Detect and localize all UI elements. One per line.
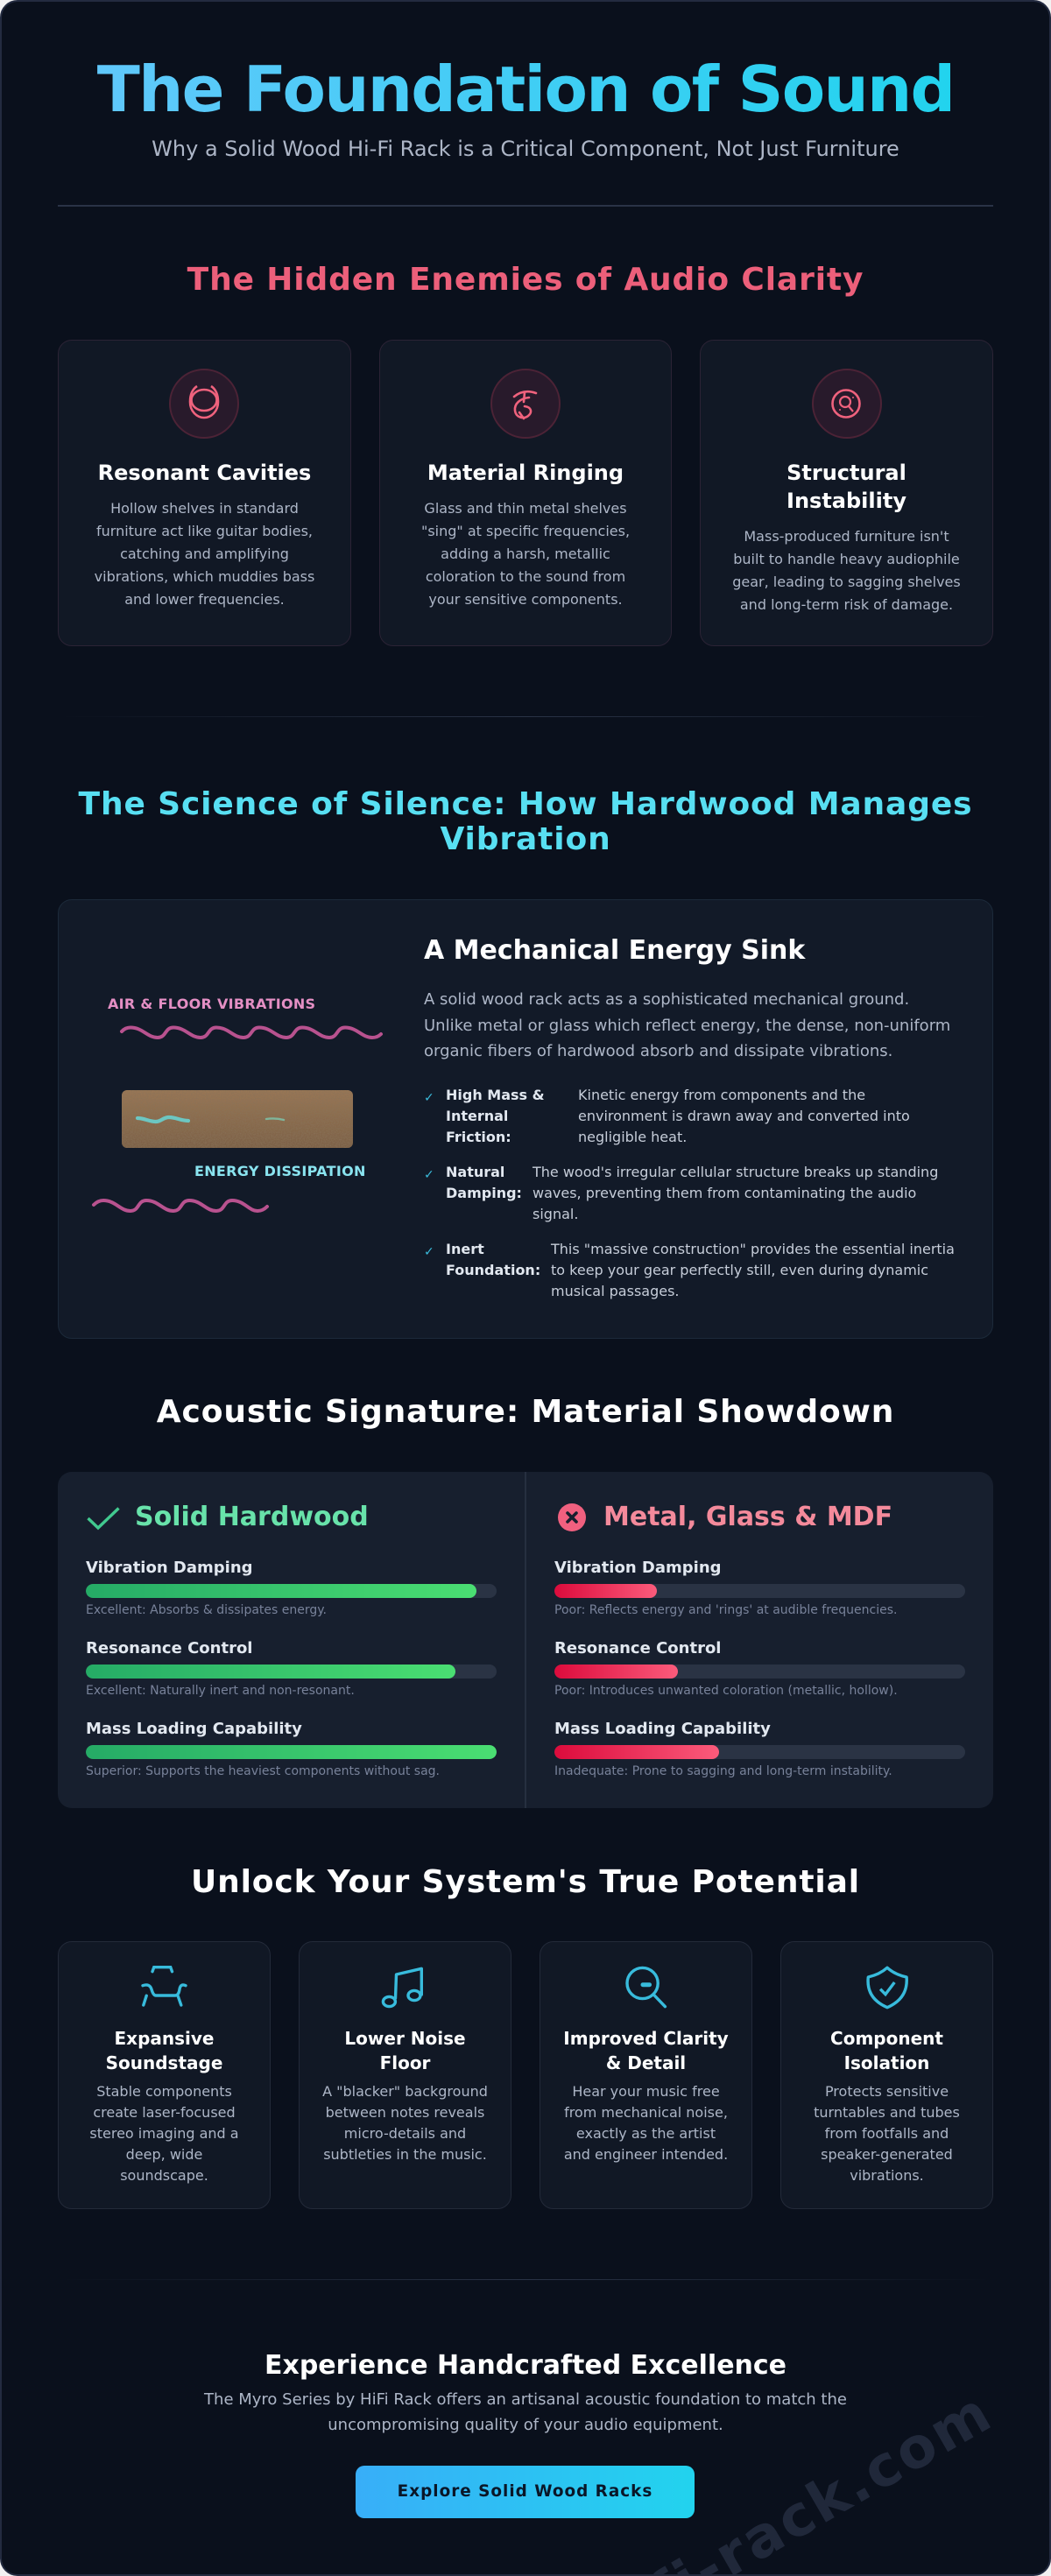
metric: mass loading: Mass Loading Capability	[554, 1720, 771, 1738]
diagram: vibration absorbing wood: ENERGY DISSIPATION	[194, 1163, 366, 1179]
list item: high mass: Friction:	[446, 1129, 511, 1145]
icon: resonant cavities	[169, 369, 239, 439]
metric: mass loading	[86, 1720, 497, 1778]
panel: structural instability	[700, 340, 993, 646]
paragraph: A solid wood rack acts as a sophisticated mechanical ground.	[424, 990, 909, 1009]
list item: inert foundation: Foundation:	[446, 1262, 540, 1278]
paragraph	[424, 990, 950, 1060]
list item: inert foundation: This "massive construction" provides the essential inertia	[551, 1241, 955, 1257]
title: The Foundation of Sound	[97, 53, 954, 126]
heading: Metal, Glass & MDF	[603, 1502, 892, 1532]
heading: A Mechanical Energy Sink	[424, 935, 805, 966]
diagram: vibration absorbing wood: AIR & FLOOR VIBRATIONS	[108, 996, 315, 1012]
column: solid hardwood	[86, 1502, 497, 1778]
description: your sensitive components.	[428, 591, 623, 608]
icon: magnifier	[625, 1967, 667, 2009]
heading: Floor	[380, 2052, 430, 2073]
list item: high mass: High Mass &	[446, 1087, 545, 1103]
description: subtleties in the music.	[323, 2146, 487, 2163]
icon: check	[87, 1507, 120, 1531]
heading: Resonant Cavities	[98, 461, 311, 485]
metric: mass loading: Mass Loading Capability	[86, 1720, 302, 1738]
description: vibrations, which muddies bass	[95, 568, 314, 585]
heading: Solid Hardwood	[135, 1502, 369, 1532]
metric: resonance control	[86, 1639, 497, 1698]
panel: comparison	[58, 1472, 993, 1808]
description	[732, 528, 961, 613]
metric: resonance control: Poor: Introduces unwanted coloration (metallic, hollow).	[554, 1684, 898, 1698]
metric: vibration damping: Poor: Reflects energy and 'rings' at audible frequencies.	[554, 1603, 897, 1617]
description: exactly as the artist	[576, 2125, 716, 2142]
heading: Component	[830, 2028, 943, 2049]
heading	[106, 2028, 222, 2073]
text: call to action	[203, 2390, 847, 2434]
icon: sofa	[141, 1966, 187, 2007]
description: gear, leading to sagging shelves	[732, 574, 961, 590]
icon: music note	[382, 1967, 423, 2009]
metric: vibration damping: Vibration Damping	[554, 1559, 722, 1577]
list item: inert foundation: to keep your gear perfectly still, even during dynamic	[551, 1262, 928, 1278]
heading: science of silence: The Science of Silence: How Hardwood Manages	[79, 786, 972, 822]
heading: Isolation	[844, 2052, 929, 2073]
list item: high mass	[424, 1087, 910, 1145]
description: A "blacker" background	[322, 2083, 488, 2100]
description: soundscape.	[120, 2167, 208, 2184]
description	[95, 500, 314, 608]
icon: structural instability	[812, 369, 882, 439]
list item: high mass: Kinetic energy from components and the	[578, 1087, 865, 1103]
list item: high mass: environment is drawn away and converted into	[578, 1108, 910, 1124]
heading: Structural	[786, 461, 906, 485]
text: call to action: The Myro Series by HiFi Rack offers an artisanal acoustic foundation to match the	[204, 2390, 847, 2409]
heading: unlock potential: Unlock Your System's True Potential	[191, 1864, 860, 1900]
heading: Lower Noise	[344, 2028, 466, 2049]
column: metal glass mdf	[554, 1502, 965, 1778]
description: from footfalls and	[825, 2125, 949, 2142]
description	[814, 2083, 960, 2184]
heading: science of silence: Vibration	[440, 821, 611, 857]
heading: & Detail	[606, 2052, 686, 2073]
panel: mechanical energy sink	[58, 899, 993, 1339]
metric: mass loading	[554, 1720, 965, 1778]
metric: resonance control	[554, 1639, 965, 1698]
list item: natural damping: The wood's irregular cellular structure breaks up standing	[533, 1164, 938, 1180]
description: deep, wide	[126, 2146, 202, 2163]
heading: Improved Clarity	[563, 2028, 729, 2049]
description: turntables and tubes	[814, 2104, 960, 2121]
heading	[786, 461, 906, 513]
heading	[830, 2028, 943, 2073]
subtitle: Why a Solid Wood Hi-Fi Rack is a Critical Component, Not Just Furniture	[152, 137, 899, 161]
description: furniture act like guitar bodies,	[96, 523, 313, 539]
paragraph: Unlike metal or glass which reflect energy, the dense, non-uniform	[424, 1017, 950, 1035]
list item: natural damping: ✓	[424, 1168, 434, 1182]
heading	[344, 2028, 466, 2073]
metric: mass loading: Superior: Supports the heaviest components without sag.	[86, 1764, 440, 1778]
list item: natural damping	[424, 1164, 938, 1222]
icon: material ringing	[490, 369, 561, 439]
list item: inert foundation: ✓	[424, 1245, 434, 1259]
panel: resonant cavities	[58, 340, 351, 646]
metric: vibration damping	[554, 1559, 965, 1617]
metric: vibration damping: Vibration Damping	[86, 1559, 253, 1577]
description: vibrations.	[850, 2167, 924, 2184]
list item: inert foundation: musical passages.	[551, 1283, 680, 1299]
icon: cross	[558, 1503, 586, 1531]
text: call to action: uncompromising quality of your audio equipment.	[328, 2416, 723, 2434]
description: speaker-generated	[821, 2146, 953, 2163]
metric: vibration damping	[86, 1559, 497, 1617]
panel: improved clarity	[540, 1941, 752, 2209]
description: Glass and thin metal shelves	[424, 500, 627, 517]
panel: component isolation	[780, 1941, 993, 2209]
paragraph: organic fibers of hardwood absorb and dissipate vibrations.	[424, 1042, 892, 1060]
description	[564, 2083, 728, 2163]
list item: high mass: ✓	[424, 1091, 434, 1105]
heading	[563, 2028, 729, 2073]
heading: science of silence	[79, 786, 972, 857]
metric: vibration damping: Excellent: Absorbs & dissipates energy.	[86, 1603, 327, 1617]
metric: mass loading: Inadequate: Prone to sagging and long-term instability.	[554, 1764, 892, 1778]
description: catching and amplifying	[120, 545, 289, 562]
metric: resonance control: Excellent: Naturally inert and non-resonant.	[86, 1684, 355, 1698]
list item: natural damping: waves, preventing them from contaminating the audio	[533, 1185, 916, 1201]
description: between notes reveals	[326, 2104, 484, 2121]
description: Hear your music free	[572, 2083, 720, 2100]
metric: resonance control: Resonance Control	[554, 1639, 721, 1658]
button: Explore Solid Wood Racks	[398, 2482, 652, 2501]
list item: natural damping: Damping:	[446, 1185, 522, 1201]
description: built to handle heavy audiophile	[733, 551, 960, 567]
panel: expansive soundstage	[58, 1941, 271, 2209]
description: Protects sensitive	[825, 2083, 949, 2100]
list item: natural damping: Natural	[446, 1164, 504, 1180]
description: stereo imaging and a	[89, 2125, 239, 2142]
description	[421, 500, 630, 608]
description: micro-details and	[344, 2125, 466, 2142]
icon: shield	[866, 1967, 908, 2009]
list item: natural damping: signal.	[533, 1206, 578, 1222]
heading: material showdown: Acoustic Signature: Material Showdown	[157, 1394, 894, 1430]
list item: inert foundation: Inert	[446, 1241, 484, 1257]
description: coloration to the sound from	[426, 568, 625, 585]
button	[356, 2466, 695, 2518]
list item: high mass: negligible heat.	[578, 1129, 687, 1145]
heading: Instability	[786, 489, 906, 513]
description: Mass-produced furniture isn't	[744, 528, 949, 545]
list item: high mass: Internal	[446, 1108, 508, 1124]
description: Stable components	[96, 2083, 232, 2100]
description: create laser-focused	[93, 2104, 236, 2121]
panel: lower noise floor	[299, 1941, 511, 2209]
description	[89, 2083, 239, 2184]
heading: call to action: Experience Handcrafted Excellence	[265, 2350, 786, 2381]
description: from mechanical noise,	[564, 2104, 728, 2121]
heading: Expansive	[114, 2028, 214, 2049]
description: and engineer intended.	[564, 2146, 728, 2163]
list item: inert foundation	[424, 1241, 955, 1299]
description	[322, 2083, 488, 2163]
description: adding a harsh, metallic	[441, 545, 610, 562]
description: and lower frequencies.	[124, 591, 285, 608]
heading: Material Ringing	[427, 461, 624, 485]
description: Hollow shelves in standard	[110, 500, 299, 517]
heading: hidden enemies: The Hidden Enemies of Audio Clarity	[187, 262, 864, 298]
description: and long-term risk of damage.	[740, 596, 953, 613]
heading: Soundstage	[106, 2052, 222, 2073]
panel: material ringing	[379, 340, 672, 646]
metric: resonance control: Resonance Control	[86, 1639, 252, 1658]
description: "sing" at specific frequencies,	[421, 523, 630, 539]
